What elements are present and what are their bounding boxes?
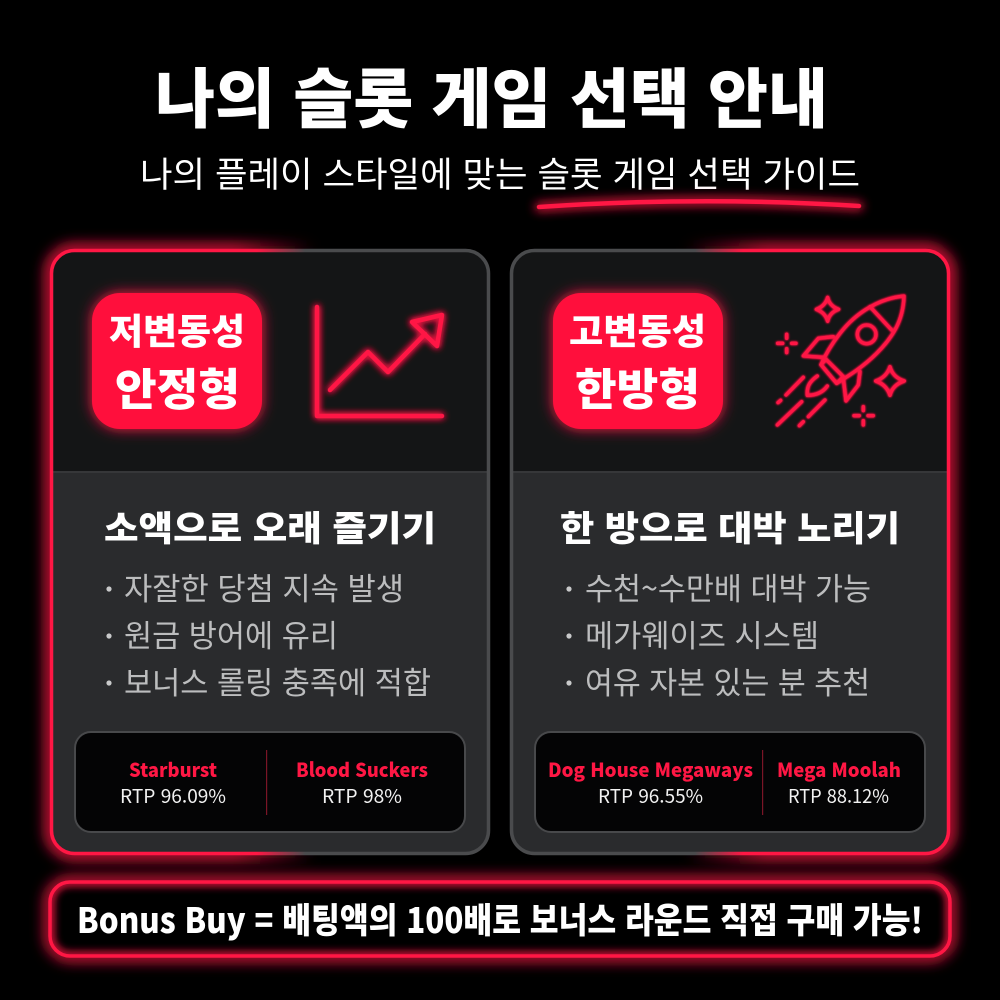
badge: low volatility stable: 안정형 bbox=[115, 354, 240, 418]
stats: high volatility games: Mega Moolah bbox=[777, 754, 901, 783]
badge: low volatility stable bbox=[92, 293, 262, 429]
icon: rising chart bbox=[317, 307, 442, 416]
list: high volatility points: 수천~수만배 대박 가능 bbox=[585, 564, 871, 609]
callout: bonus buy: Bonus Buy = 배팅액의 100배로 보너스 라운드 직접 구매 가능! bbox=[77, 893, 923, 944]
panel: low volatility bbox=[50, 249, 490, 854]
badge: high volatility jackpot bbox=[553, 293, 723, 429]
icon: rocket bbox=[777, 296, 904, 426]
title: 나의 슬롯 게임 선택 안내 bbox=[155, 47, 828, 141]
stats: high volatility games: RTP 88.12% bbox=[788, 782, 889, 809]
list: low volatility points bbox=[106, 564, 431, 703]
heading: low volatility: 소액으로 오래 즐기기 bbox=[104, 501, 436, 552]
stats: low volatility games: Starburst bbox=[129, 754, 217, 783]
list: low volatility points: 자잘한 당첨 지속 발생 bbox=[124, 564, 404, 609]
list: high volatility points bbox=[566, 564, 871, 703]
stats: high volatility games: RTP 96.55% bbox=[598, 782, 703, 809]
panel: high volatility bbox=[510, 249, 950, 854]
list: low volatility points: 원금 방어에 유리 bbox=[124, 611, 338, 656]
list: high volatility points: 메가웨이즈 시스템 bbox=[585, 611, 819, 656]
badge: high volatility jackpot: 한방형 bbox=[575, 354, 700, 418]
stats: low volatility games bbox=[75, 732, 465, 832]
subtitle underline bbox=[539, 201, 859, 207]
stats: high volatility games: Dog House Megaways bbox=[548, 754, 753, 783]
badge: high volatility jackpot: 고변동성 bbox=[569, 303, 706, 355]
subtitle: 나의 플레이 스타일에 맞는 슬롯 게임 선택 가이드 bbox=[140, 147, 860, 198]
stats: low volatility games: RTP 96.09% bbox=[120, 782, 226, 809]
badge: low volatility stable: 저변동성 bbox=[109, 303, 245, 355]
heading: high volatility: 한 방으로 대박 노리기 bbox=[560, 501, 900, 552]
stats: low volatility games: Blood Suckers bbox=[296, 754, 428, 783]
stats: high volatility games bbox=[535, 732, 925, 832]
stats: low volatility games: RTP 98% bbox=[322, 782, 402, 809]
list: low volatility points: 보너스 롤링 충족에 적합 bbox=[124, 658, 431, 703]
callout: bonus buy bbox=[50, 882, 950, 956]
list: high volatility points: 여유 자본 있는 분 추천 bbox=[585, 658, 870, 703]
